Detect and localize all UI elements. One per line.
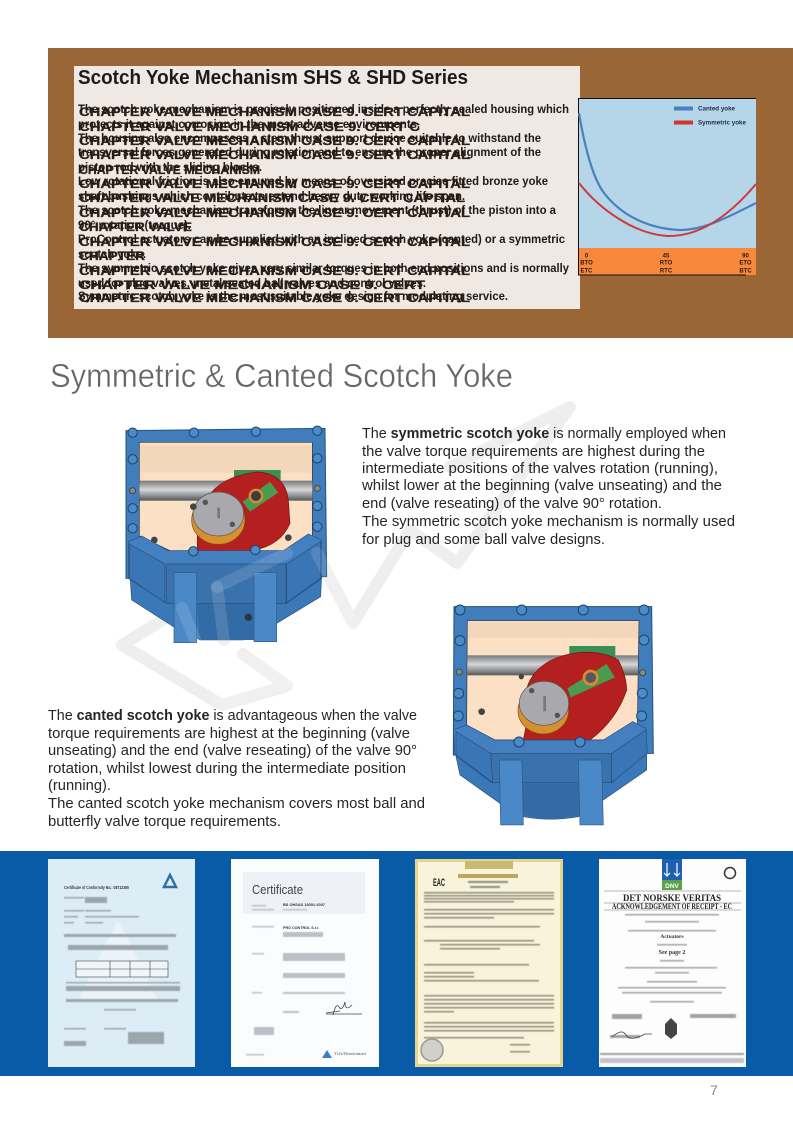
overprinted garbled text layer: CHAPTER VALVE MECHANISM CASE 9. CERT C [79, 120, 420, 134]
description card [74, 66, 580, 309]
chart axis labels: 0 [585, 254, 589, 260]
section heading: Symmetric & Canted Scotch Yoke [50, 357, 513, 394]
chart axis band [579, 248, 756, 275]
curve: symmetric yoke [579, 183, 756, 236]
watermark overlay on illustrations [182, 553, 353, 705]
chart axis labels [580, 254, 752, 274]
text block: canted scotch yoke: The canted scotch yoke is advantageous when the valve [48, 707, 417, 724]
certificate 1: TUV conformity [48, 859, 195, 1067]
text block: canted scotch yoke: The canted scotch yoke mechanism covers most ball and [48, 795, 425, 812]
certificate 1 table [76, 961, 168, 977]
certificate 2: ISO certificate: Certificate [252, 882, 303, 897]
curve: canted yoke [579, 113, 756, 230]
certificate 1: TUV conformity: Certificate of Conformity No.: 08712380 [64, 885, 129, 890]
actuator illustration: symmetric yoke [126, 426, 327, 643]
chart axis labels: ETC [580, 268, 593, 274]
certificate 4 signature [612, 1032, 652, 1038]
text block: canted scotch yoke: (running). [48, 777, 111, 794]
chart legend: Symmetric yoke [698, 120, 746, 126]
overprinted garbled text layer: CHAPTER VALVE MECHANISM CASE 9. CERT CAPITAL [79, 264, 470, 278]
card body text: transversal forces generated during rotation and to ensure the proper alignment of the [78, 145, 541, 159]
torque chart [578, 98, 756, 275]
card body text: used for plug valves, metal seated ball valves and control valves. [78, 276, 426, 290]
certificate 4: DNV acknowledgement [599, 859, 746, 1067]
chart legend [674, 106, 746, 126]
text block: symmetric scotch yoke: whilst lower at the beginning (valve unseating) and the [361, 477, 722, 494]
header panel: brown band [48, 48, 793, 338]
certificates band [0, 851, 793, 1076]
overprinted garbled text layer: CHAPTER VALVE MECHANISM CASE 9. CERT CAPITAL [79, 235, 470, 249]
overprinted garbled text layer: CHAPTER VALVE MECHANISM CASE 9. CERT CAPITAL [79, 291, 470, 305]
actuator illustration: canted yoke [453, 605, 653, 825]
text block: canted scotch yoke [48, 707, 425, 830]
certificate 4 seal [665, 1018, 677, 1039]
card body text: 90° rotation (torque). [78, 218, 191, 232]
text block: symmetric scotch yoke [361, 425, 735, 548]
card body text: scotch yoke. [78, 247, 146, 261]
overprinted garbled text layer: CHAPTER VALVE MECHANISM CASE 9. CERT CAPITAL [79, 148, 470, 162]
card body text: shaft bushings which contribute to extend heavy duty working life span. [78, 189, 465, 203]
text block: symmetric scotch yoke: The symmetric scotch yoke is normally employed when [362, 425, 726, 442]
certificate 4: DNV acknowledgement: Actuators [660, 934, 684, 940]
overprinted garbled text layer: CHAPTER VALVE MECHANISM [79, 163, 260, 177]
overprinted garbled text layer: CHAPTER VALVE MECHANISM CASE 9. CERT CAPITAL [79, 206, 470, 220]
certificate 2: ISO certificate: PRO CONTROL S.r.l. [283, 925, 319, 930]
card body text: piston rod with the sliding blocks. [78, 160, 262, 174]
certificate 1 logo [164, 875, 176, 887]
overprinted garbled text layer [79, 105, 470, 305]
card body text: protects it against corrosion in the most adverse environments. [78, 117, 420, 131]
text block: symmetric scotch yoke: end (valve reseating) of the valve 90° rotation. [362, 495, 662, 512]
chart legend: Canted yoke [698, 106, 735, 112]
overprinted garbled text layer: CHAPTER VALVE MECHANISM CASE 9. CERT CAPITAL [79, 105, 470, 119]
overprinted garbled text layer: CHAPTER VALVE MECHANISM CASE 9. CERT CAPITAL [79, 134, 470, 148]
chart axis labels: RTC [660, 268, 673, 274]
text block: canted scotch yoke: rotation, whilst lowest during the intermediate position [48, 760, 406, 777]
certificate 4 mark [724, 868, 736, 878]
overprinted garbled text layer: CHAPTER [79, 249, 145, 263]
overprinted garbled text layer: CHAPTER VALVE [79, 220, 192, 234]
card body text: The symmetric scotch yoke gives very similar torques in both end positions and is normally [78, 261, 569, 275]
text block: symmetric scotch yoke: The symmetric scotch yoke mechanism is normally used [362, 513, 735, 530]
certificate 4 DNV logo [662, 859, 682, 890]
card body text: Low rotational friction is also ensured by means of oversized precise fitted bronze yoke [78, 174, 548, 188]
page number: 7 [710, 1082, 718, 1098]
certificate 4: DNV acknowledgement: DET NORSKE VERITAS [623, 894, 721, 904]
chart axis labels: 90 [742, 254, 749, 260]
certificate 4 DNV logo: DNV [665, 883, 680, 890]
certificate 3 stamp [421, 1039, 443, 1061]
text block: symmetric scotch yoke: the valve torque requirements are highest during the [362, 443, 705, 460]
certificate 2: ISO certificate [231, 859, 379, 1067]
card body text: Symmetric scotch yoke is the most suitable yoke design for modulating service. [78, 289, 508, 303]
certificate 3 EAC mark: EAC [433, 877, 445, 889]
watermark [122, 407, 570, 705]
card body text: The scotch yoke mechanism is precisely positioned inside a perfectly sealed housing which [78, 102, 569, 116]
card body text [78, 102, 569, 303]
text block: symmetric scotch yoke: intermediate positions of the valves rotation (running), [362, 460, 718, 477]
certificate 2 logo [322, 1050, 332, 1058]
chart axis labels: ETO [739, 260, 752, 266]
chart axis labels: BTC [739, 268, 752, 274]
card body text: The housing also encompasses a stem thrust support device suitable to withstand the [78, 131, 541, 145]
text block: symmetric scotch yoke: for plug and some ball valve designs. [362, 531, 605, 548]
certificate 2 signature [326, 1002, 362, 1015]
certificate 3: EAC declaration [415, 859, 563, 1067]
overprinted garbled text layer: CHAPTER VALVE MECHANISM CASE 9. CERT [79, 278, 426, 292]
certificate 2: ISO certificate: BS OHSAS 18001:2007 [283, 902, 326, 907]
certificate 2: ISO certificate: TÜVRheinland [334, 1051, 366, 1056]
overprinted garbled text layer: CHAPTER VALVE MECHANISM CASE 9. CERT CAPITAL [79, 191, 465, 205]
overprinted garbled text layer: CHAPTER VALVE MECHANISM CASE 9. CERT CAPITAL [79, 177, 470, 191]
card body text: ProControl actuators can be supplied with an inclined scotch yoke (canted) or a symmetric [78, 232, 565, 246]
text block: canted scotch yoke: butterfly valve torque requirements. [48, 813, 281, 830]
certificate 4: DNV acknowledgement: ACKNOWLEDGEMENT OF RECEIPT - EC [612, 902, 732, 911]
card title: Scotch Yoke Mechanism SHS & SHD Series [78, 67, 468, 89]
chart axis labels: 45 [663, 254, 670, 260]
text block: canted scotch yoke: torque requirements are highest at the beginning (valve [48, 725, 410, 742]
text block: canted scotch yoke: unseating) and the end (valve reseating) of the valve 90° [48, 742, 417, 759]
chart axis labels: RTO [660, 260, 673, 266]
card body text: The scotch yoke mechanism transforms the linear movement (thrust) of the piston into a [78, 203, 556, 217]
certificate 4: DNV acknowledgement: See page 2 [659, 950, 685, 956]
chart axis labels: BTO [580, 260, 593, 266]
